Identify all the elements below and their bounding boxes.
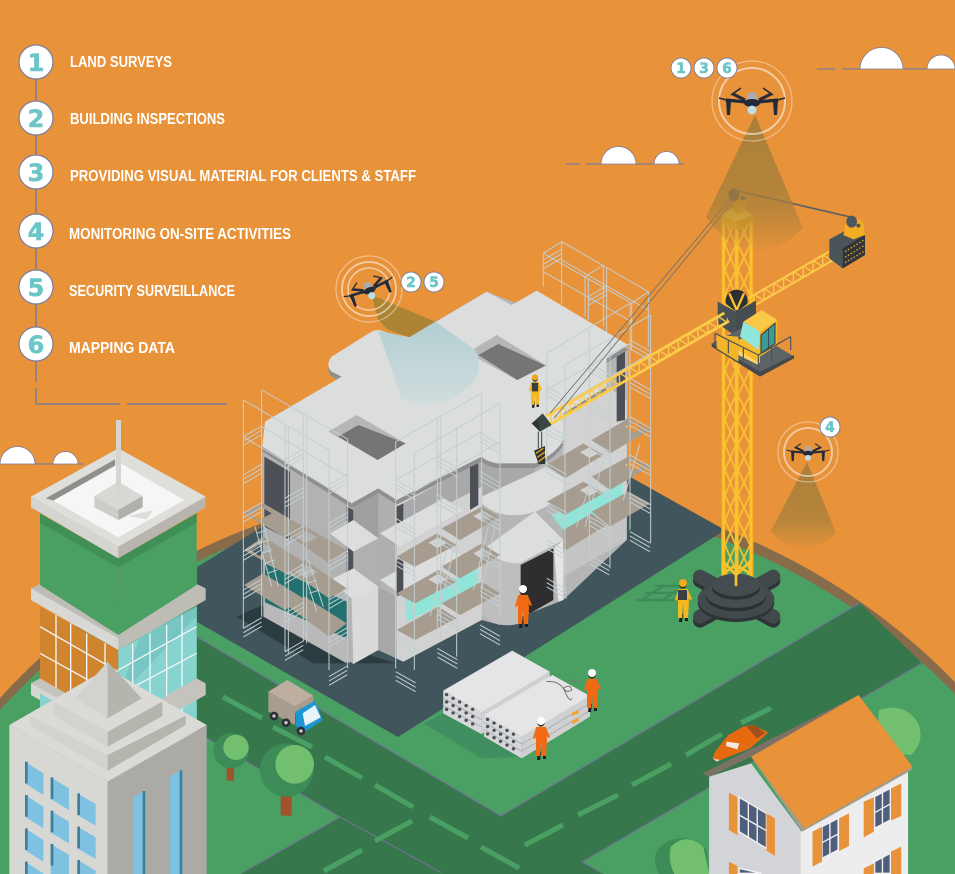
scaffold planks bbox=[547, 418, 650, 552]
worker at crane base bbox=[675, 579, 692, 622]
tower lower wall bbox=[40, 693, 197, 750]
entrance volume bbox=[482, 560, 520, 625]
cloud: middle bbox=[566, 146, 684, 164]
hook block bbox=[532, 413, 552, 432]
tower middle ring bbox=[31, 584, 206, 650]
list item 5: SECURITY SURVEILLANCE bbox=[69, 283, 235, 300]
right tree behind house bbox=[878, 708, 921, 755]
list item 1: LAND SURVEYS bbox=[70, 54, 172, 71]
cloud: upper right bbox=[817, 48, 955, 69]
badges 2 5: 5 bbox=[429, 275, 439, 291]
tower lower ring bbox=[31, 678, 206, 743]
badges 1 3 6: 6 bbox=[722, 61, 732, 77]
front building windows right bbox=[133, 769, 183, 874]
curved balcony bbox=[482, 457, 535, 503]
scaffold planks bbox=[244, 503, 347, 637]
tower crane head details bbox=[718, 188, 865, 337]
left lower wall bbox=[263, 602, 347, 663]
left facade bbox=[263, 453, 350, 663]
list item 2 bbox=[19, 101, 225, 135]
front building walls bbox=[9, 725, 108, 874]
tower crane main boom bbox=[532, 199, 733, 432]
list item 4 bbox=[19, 214, 291, 248]
tower building bbox=[31, 420, 206, 750]
front building windows left bbox=[25, 762, 96, 874]
garage door bbox=[521, 548, 553, 613]
sling cable bbox=[738, 191, 853, 218]
list item 4: 4 bbox=[28, 218, 44, 246]
list item 6 bbox=[19, 327, 175, 361]
badges 2 5 bbox=[401, 272, 444, 292]
orange car bbox=[713, 725, 768, 762]
drone 2 beam on roof bbox=[378, 322, 479, 405]
mast cap bbox=[722, 205, 753, 230]
drone 2 bbox=[341, 269, 398, 309]
drone 3 signal rings bbox=[778, 422, 838, 482]
list item 4: MONITORING ON-SITE ACTIVITIES bbox=[69, 226, 291, 243]
tree large bbox=[260, 743, 314, 816]
drone 2 signal rings bbox=[336, 256, 402, 322]
roof opening right bbox=[467, 335, 546, 380]
tower glass section bbox=[40, 607, 197, 750]
list item 1: 1 bbox=[28, 49, 44, 77]
list item 6: MAPPING DATA bbox=[69, 340, 175, 357]
road dashes bbox=[223, 697, 771, 871]
counterweight bbox=[829, 216, 865, 268]
scaffold planks bbox=[397, 507, 500, 640]
roof opening left bbox=[328, 415, 406, 460]
badges 1 3 6: 3 bbox=[699, 61, 709, 77]
drone 2 beam over sky bbox=[372, 295, 435, 337]
house windows bbox=[739, 788, 890, 873]
crane hook weight bbox=[534, 432, 545, 464]
list item 3: PROVIDING VISUAL MATERIAL FOR CLIENTS & STAFF bbox=[70, 168, 416, 185]
list item 5: 5 bbox=[28, 274, 44, 302]
tower roof bbox=[31, 448, 206, 558]
badges 1 3 6 bbox=[671, 58, 737, 78]
drone 3 bbox=[787, 444, 829, 461]
central blocks bbox=[353, 488, 378, 552]
house bbox=[703, 695, 912, 874]
house shutters bbox=[729, 783, 901, 874]
tree small bbox=[213, 733, 249, 781]
front building roof tiers bbox=[9, 668, 207, 782]
slab stack rear bbox=[443, 651, 550, 734]
worker at door bbox=[515, 585, 532, 628]
boom suspension cables bbox=[550, 199, 733, 418]
slab stack front bbox=[484, 675, 590, 758]
tower crane mast bbox=[722, 218, 753, 592]
operator cabin bbox=[717, 310, 777, 365]
right wing wall bbox=[563, 387, 627, 577]
platform railing bbox=[715, 333, 791, 368]
list item 3 bbox=[19, 155, 416, 189]
dark teal windows bbox=[265, 563, 347, 638]
crane lattice shadow on the ground bbox=[635, 585, 686, 601]
badge 4: 4 bbox=[825, 420, 835, 436]
scaffold right wing bbox=[547, 303, 651, 598]
list item 3: 3 bbox=[28, 159, 44, 187]
roads bbox=[197, 603, 922, 874]
front right facade bbox=[397, 457, 482, 662]
drone 1 camera beam bbox=[706, 115, 803, 252]
drone 1 bbox=[719, 88, 785, 115]
mast pulley bbox=[728, 188, 747, 215]
operator platform bbox=[712, 327, 794, 377]
tower crane operator unit bbox=[712, 310, 794, 377]
building bbox=[262, 291, 628, 664]
asphalt site bbox=[197, 393, 725, 737]
scaffold shadow on asphalt bbox=[237, 600, 397, 663]
list item 5 bbox=[19, 270, 235, 304]
slewing unit bbox=[718, 290, 756, 337]
front building bbox=[9, 662, 207, 874]
badges 2 5: 2 bbox=[406, 275, 416, 291]
roof edge shade bbox=[262, 295, 628, 508]
roof bbox=[262, 291, 628, 503]
list item 6: 6 bbox=[28, 331, 44, 359]
list connector line bbox=[36, 62, 227, 404]
list item 1 bbox=[19, 45, 172, 79]
rear scaffold bbox=[543, 242, 648, 350]
cloud: left bbox=[0, 446, 83, 464]
badge 4 bbox=[820, 417, 840, 437]
crane base bbox=[698, 560, 774, 622]
tower crane rear boom bbox=[749, 249, 838, 306]
concrete slabs bbox=[423, 651, 590, 758]
scaffold left facade bbox=[243, 390, 348, 685]
house walls bbox=[709, 763, 801, 874]
worker beside slabs bbox=[584, 669, 601, 712]
list item 2: BUILDING INSPECTIONS bbox=[70, 111, 225, 128]
ground globe rim bbox=[0, 484, 955, 874]
building body bbox=[262, 292, 628, 664]
bright windows bbox=[405, 568, 478, 622]
scaffold front facade bbox=[396, 393, 500, 692]
tree near bottom bbox=[655, 838, 709, 874]
ground green bbox=[0, 495, 955, 874]
tower green section bbox=[40, 513, 197, 635]
delivery truck bbox=[268, 680, 323, 735]
drone 3 camera beam bbox=[771, 462, 836, 549]
tower mast bbox=[116, 420, 121, 495]
worker on roof bbox=[529, 374, 542, 408]
drone 1 signal rings bbox=[712, 61, 792, 141]
badges 1 3 6: 1 bbox=[676, 61, 686, 77]
worker in front of slabs bbox=[533, 717, 550, 760]
house roof bbox=[703, 695, 859, 777]
list item 2: 2 bbox=[28, 105, 44, 133]
